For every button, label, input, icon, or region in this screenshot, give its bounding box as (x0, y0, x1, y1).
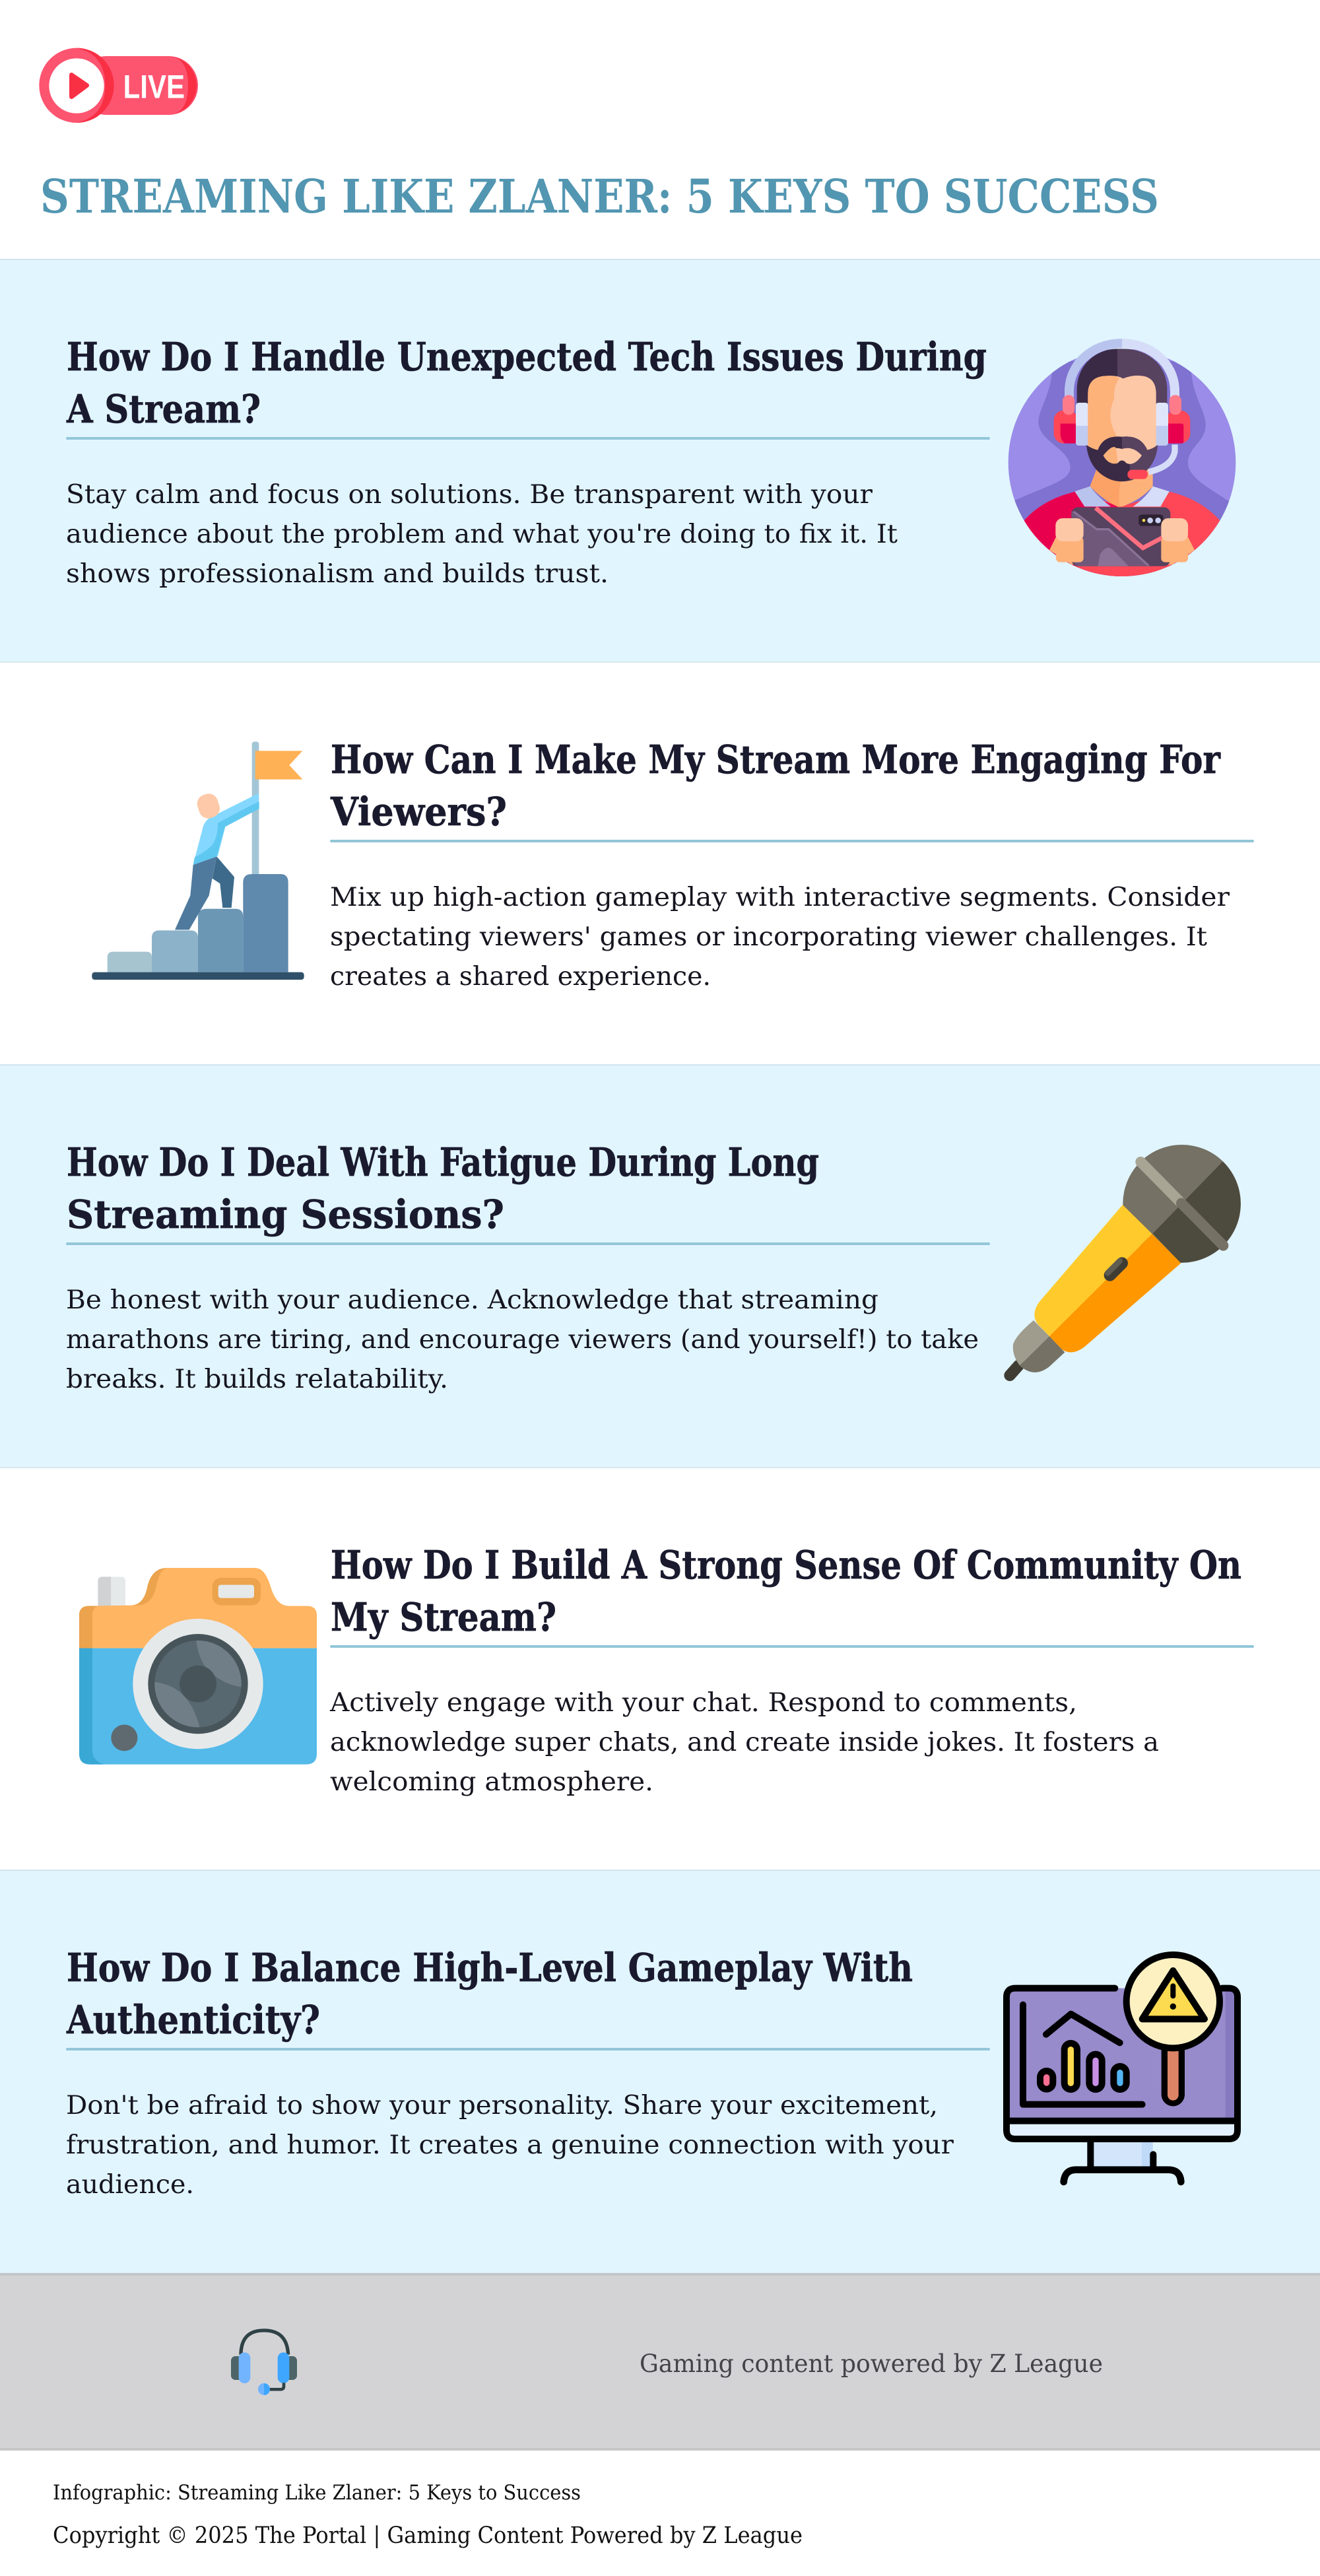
text block: authenticity: audience. (66, 2170, 194, 2200)
text: infographic name: Infographic: Streaming Like Zlaner: 5 Keys to Success (53, 2481, 581, 2505)
text block: authenticity: Don't be afraid to show your personality. Share your excitement, (66, 2091, 938, 2120)
heading: engaging stream (330, 737, 1221, 834)
text block: community: welcoming atmosphere. (330, 1767, 653, 1797)
heading: authenticity: How Do I Balance High-Level Gameplay With (67, 1945, 913, 1990)
panel: header (39, 48, 1159, 224)
text: copyright: Copyright © 2025 The Portal | Gaming Content Powered by Z League (53, 2523, 803, 2549)
text block: engaging stream (330, 883, 1230, 992)
heading: tech issues: How Do I Handle Unexpected Tech Issues During (67, 334, 987, 380)
text block: fatigue: Be honest with your audience. Acknowledge that streaming (66, 1285, 878, 1315)
text block: engaging stream: spectating viewers' games or incorporating viewer challenges. It (330, 922, 1207, 952)
icon: climbing figure with flag (92, 741, 304, 980)
icon: monitor with warning magnifier (1006, 1955, 1238, 2182)
text block: fatigue: breaks. It builds relatability. (66, 1365, 448, 1394)
text block: tech issues: shows professionalism and builds trust. (66, 559, 609, 589)
text block: engaging stream: Mix up high-action gameplay with interactive segments. Consider (330, 883, 1230, 912)
heading: tech issues: A Stream? (66, 386, 261, 432)
text block: fatigue (66, 1285, 979, 1394)
text block: community (329, 1688, 1159, 1797)
heading: authenticity: Authenticity? (66, 1997, 320, 2043)
icon: live badge: LIVE (123, 68, 185, 105)
panel: authenticity (0, 1870, 1320, 2273)
heading: engaging stream: Viewers? (330, 789, 507, 834)
text: powered by: Gaming content powered by Z League (640, 2350, 1103, 2378)
title: STREAMING LIKE ZLANER: 5 KEYS TO SUCCESS (40, 169, 1159, 224)
heading: fatigue: How Do I Deal With Fatigue During Long (67, 1139, 819, 1185)
text block: tech issues: audience about the problem and what you're doing to fix it. It (66, 520, 898, 549)
text block: tech issues: Stay calm and focus on solutions. Be transparent with your (66, 480, 873, 510)
heading: fatigue: Streaming Sessions? (67, 1192, 504, 1237)
panel: community (0, 1467, 1320, 1797)
icon: headset (231, 2330, 297, 2395)
heading: community (331, 1542, 1241, 1640)
icon: live badge (39, 48, 198, 123)
heading: authenticity (66, 1945, 913, 2043)
panel: tech issues (0, 259, 1320, 661)
text block: fatigue: marathons are tiring, and encourage viewers (and yourself!) to take (66, 1325, 979, 1355)
icon: microphone (1010, 1145, 1241, 1375)
heading: fatigue (67, 1139, 819, 1237)
text block: community: Actively engage with your chat. Respond to comments, (329, 1688, 1077, 1718)
icon: camera (79, 1568, 317, 1765)
panel: engaging stream (0, 661, 1320, 992)
text block: tech issues (66, 480, 898, 589)
heading: community: My Stream? (331, 1594, 556, 1640)
icon: gamer avatar (1008, 343, 1241, 581)
text block: authenticity (66, 2091, 954, 2200)
panel: fatigue (0, 1064, 1320, 1467)
text block: engaging stream: creates a shared experience. (330, 962, 711, 992)
heading: tech issues (66, 334, 987, 432)
text block: community: acknowledge super chats, and create inside jokes. It fosters a (330, 1728, 1159, 1757)
text block: authenticity: frustration, and humor. It creates a genuine connection with your (66, 2130, 954, 2160)
panel: powered-by band (0, 2273, 1320, 2451)
footer (53, 2481, 803, 2549)
